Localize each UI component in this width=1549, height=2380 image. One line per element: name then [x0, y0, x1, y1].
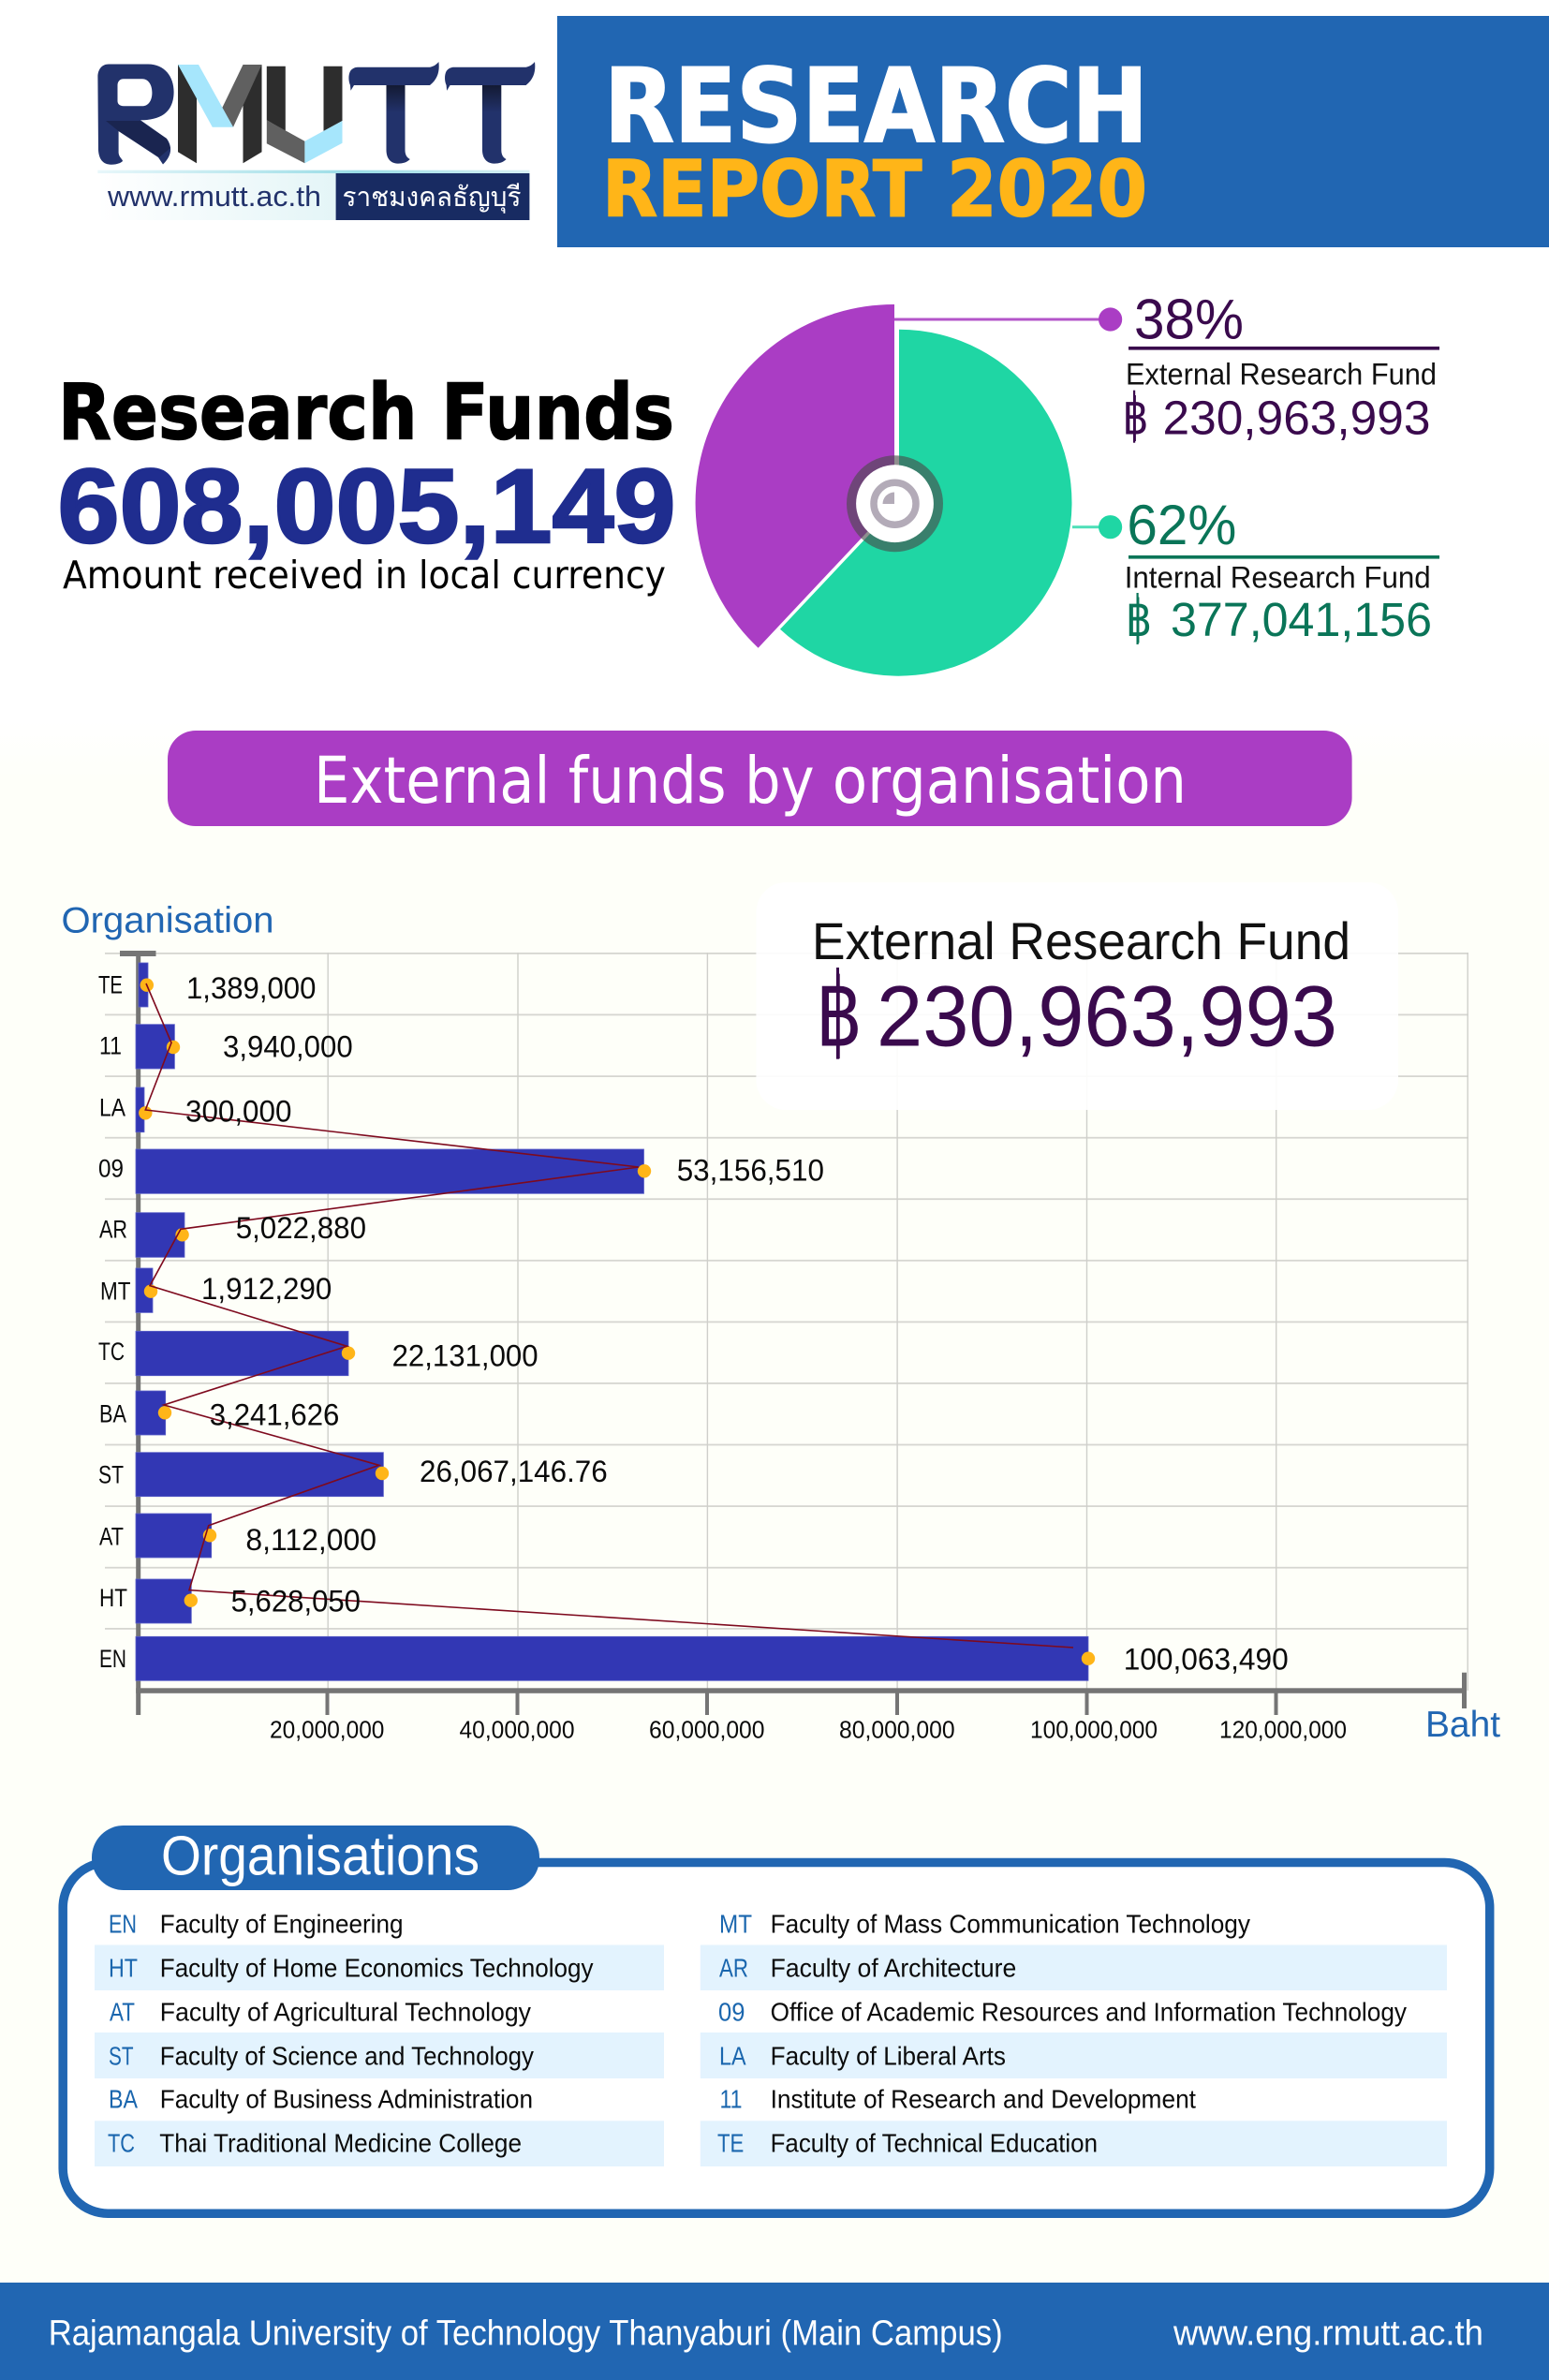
callout: external fund 38%: ฿ — [1122, 388, 1148, 447]
left column list — [108, 1909, 594, 2157]
right column list — [717, 1909, 1407, 2157]
left column list: Faculty of Science and Technology — [160, 2042, 534, 2071]
axis title: Organisation: Organisation — [62, 901, 273, 941]
footer: Rajamangala University of Technology Thanyaburi (Main Campus) — [49, 2313, 1003, 2353]
right column list: 09 — [718, 1998, 745, 2027]
research funds total — [58, 368, 676, 598]
left column list: Faculty of Business Administration — [160, 2085, 533, 2114]
callout box: external research fund total — [756, 882, 1398, 1110]
footer: www.eng.rmutt.ac.th — [1173, 2313, 1483, 2353]
callout: external fund 38%: 38% — [1134, 288, 1244, 351]
total amount: 608,005,149 — [58, 448, 676, 565]
slice: external 38% — [696, 304, 894, 648]
right column list: LA — [719, 2042, 746, 2071]
callout box: external research fund total: ฿ — [816, 959, 863, 1069]
left column list: HT — [109, 1953, 138, 1982]
value labels: 100,063,490 — [1124, 1642, 1289, 1676]
logo: RMUTT: www.rmutt.ac.th — [107, 180, 321, 213]
x axis tick labels: 80,000,000 — [839, 1718, 955, 1744]
organisation code labels: TC — [98, 1338, 125, 1366]
left column list: Thai Traditional Medicine College — [159, 2128, 522, 2157]
organisation code labels: BA — [99, 1400, 126, 1428]
value labels: 1,912,290 — [201, 1272, 332, 1306]
callout: internal fund 62%: ฿ — [1126, 589, 1152, 648]
callout: external fund 38%: External Research Fund — [1126, 358, 1437, 392]
organisation code labels — [98, 971, 131, 1673]
pie chart: internal vs external funds — [696, 304, 1071, 676]
bar chart: external funds by organisation — [62, 901, 1500, 1745]
organisation code labels: 11 — [99, 1032, 122, 1060]
callout: internal fund 62%: 62% — [1127, 494, 1236, 556]
title: Research: RESEARCH — [604, 47, 1148, 166]
header banner — [557, 16, 1549, 247]
section banner: external funds by organisation — [168, 731, 1352, 826]
caption: amount received: Amount received in local currency — [63, 553, 666, 598]
right column list: Faculty of Architecture — [771, 1953, 1016, 1982]
callout: internal fund 62% — [1072, 494, 1439, 648]
right column list: Faculty of Mass Communication Technology — [771, 1909, 1250, 1938]
value labels: 5,628,050 — [231, 1585, 361, 1619]
data point dots — [139, 978, 1095, 1665]
pie centre hub — [847, 455, 943, 552]
right column list: 11 — [719, 2085, 742, 2114]
left column list: EN — [109, 1909, 137, 1938]
heading: Research Funds: Research Funds — [58, 368, 674, 457]
x axis tick labels: 20,000,000 — [270, 1718, 384, 1744]
organisation code labels: AR — [99, 1216, 127, 1244]
right column list: AR — [719, 1953, 748, 1982]
organisation code labels: EN — [99, 1645, 126, 1673]
value labels: 3,241,626 — [210, 1398, 339, 1432]
left column list: AT — [110, 1998, 135, 2027]
callout box: external research fund total: 230,963,993 — [877, 969, 1337, 1065]
x axis tick labels — [270, 1718, 1347, 1744]
footer — [0, 2283, 1549, 2380]
value labels: 26,067,146.76 — [420, 1455, 608, 1488]
organisation code labels: AT — [99, 1523, 124, 1551]
title: Report 2020: REPORT 2020 — [602, 144, 1147, 235]
callout: internal fund 62%: Internal Research Fund — [1125, 560, 1431, 594]
logo: RMUTT: ราชมงคลธัญบุรี — [343, 183, 521, 214]
left column list: ST — [109, 2042, 133, 2071]
left column list: BA — [109, 2085, 138, 2114]
organisation code labels: MT — [100, 1278, 131, 1306]
value labels: 53,156,510 — [677, 1154, 824, 1188]
value labels: 5,022,880 — [236, 1211, 366, 1245]
left column stripes — [95, 1944, 664, 2166]
left column list: TC — [108, 2128, 135, 2157]
bars — [136, 963, 1088, 1680]
callout: external fund 38% — [894, 288, 1439, 447]
x axis tick labels: 60,000,000 — [649, 1718, 764, 1744]
x axis tick labels: 120,000,000 — [1219, 1718, 1347, 1744]
trend line — [145, 983, 1073, 1648]
value labels: 300,000 — [185, 1095, 291, 1129]
logo letter R — [97, 64, 174, 165]
section banner: external funds by organisation: External funds by organisation — [314, 744, 1187, 819]
callout: external fund 38%: 230,963,993 — [1163, 392, 1431, 445]
value labels: 1,389,000 — [186, 971, 316, 1005]
organisation code labels: TE — [98, 971, 123, 999]
organisation code labels: 09 — [98, 1155, 124, 1183]
axis title: Baht: Baht — [1425, 1705, 1500, 1745]
right column list: Faculty of Liberal Arts — [771, 2042, 1006, 2071]
right column list: Faculty of Technical Education — [771, 2128, 1098, 2157]
logo: RMUTT — [97, 62, 535, 220]
left column list: Faculty of Engineering — [160, 1909, 404, 1938]
organisation code labels: LA — [99, 1094, 125, 1122]
axes — [120, 951, 1467, 1715]
value labels: 22,131,000 — [392, 1339, 538, 1373]
right column list: TE — [717, 2128, 744, 2157]
callout box: external research fund total: External Research Fund — [812, 911, 1350, 970]
left column list: Faculty of Home Economics Technology — [160, 1953, 594, 1982]
value labels — [185, 971, 1289, 1676]
value labels: 3,940,000 — [223, 1029, 353, 1063]
right column stripes — [701, 1944, 1447, 2166]
panel heading pill: Organisations — [161, 1826, 479, 1887]
slice: internal 62% — [780, 330, 1071, 676]
right column list: Office of Academic Resources and Information Technology — [771, 1998, 1407, 2027]
organisation code labels: HT — [99, 1584, 127, 1612]
panel: organisations — [63, 1826, 1490, 2213]
organisation code labels: ST — [98, 1461, 124, 1489]
callout: internal fund 62%: 377,041,156 — [1171, 593, 1432, 646]
right column list: Institute of Research and Development — [771, 2085, 1196, 2114]
x axis tick labels: 100,000,000 — [1030, 1718, 1158, 1744]
x axis tick labels: 40,000,000 — [459, 1718, 575, 1744]
right column list: MT — [719, 1909, 752, 1938]
left column list: Faculty of Agricultural Technology — [160, 1998, 531, 2027]
value labels: 8,112,000 — [245, 1523, 376, 1557]
